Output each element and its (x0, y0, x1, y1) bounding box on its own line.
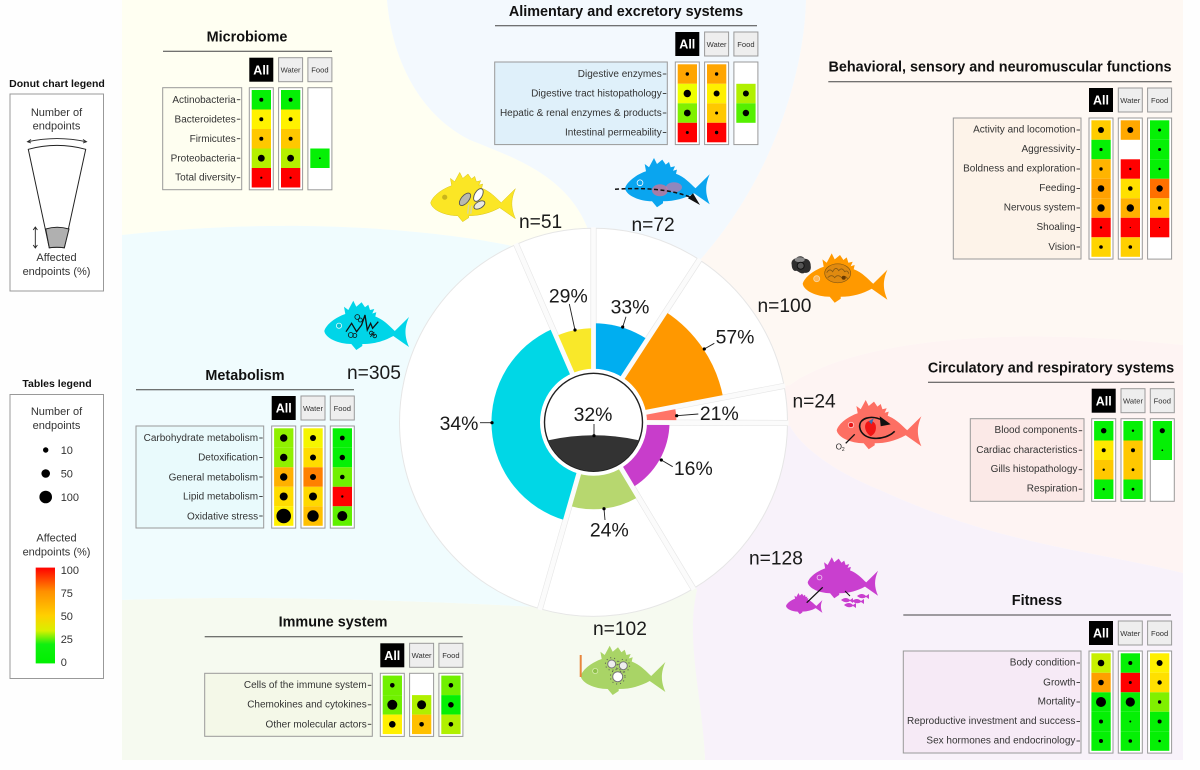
header: All (1089, 88, 1113, 112)
icon: orange fish with brain and camera (792, 253, 887, 303)
legend sector fill (46, 227, 69, 248)
row labels: Sex hormones and endocrinology (926, 736, 1075, 746)
heading: microbiome: Microbiome (207, 30, 287, 46)
table body: immune (205, 643, 463, 736)
header: All: All (679, 38, 695, 52)
percent label: 29% (549, 286, 588, 332)
header: Water (1121, 389, 1145, 413)
row labels: Proteobacteria (171, 154, 236, 165)
row labels (953, 118, 1081, 259)
row labels: Mortality (1038, 696, 1075, 708)
row labels: Intestinal permeability (565, 127, 662, 138)
row labels: Carbohydrate metabolism (144, 433, 258, 444)
sector: circulatory 21% (594, 407, 677, 423)
icon: purple fish with offspring (786, 557, 878, 614)
header: Food: Food (334, 404, 351, 413)
row labels: Boldness and exploration (963, 164, 1075, 174)
legend text: affected endpoints: Affected (36, 532, 77, 544)
count label: n=305: n=305 (347, 363, 401, 384)
background region: immune (122, 422, 705, 760)
sector: immune 24% (570, 422, 638, 509)
row labels (163, 88, 242, 190)
row labels: Shoaling (1036, 222, 1075, 233)
header: All: All (384, 649, 400, 663)
column: Food (330, 426, 354, 528)
table body: behavioral (953, 88, 1172, 259)
color scale (36, 565, 79, 669)
table body: circulatory (970, 389, 1174, 501)
row labels (205, 673, 372, 736)
header: All (1092, 389, 1116, 413)
percent label: 34%: 34% (440, 413, 478, 435)
percent label: 33% (611, 296, 649, 329)
table body: fitness (903, 621, 1172, 753)
header: Food: Food (442, 651, 460, 660)
header: Water (279, 58, 303, 82)
row labels: Activity and locomotion (973, 124, 1075, 136)
column: Water (1121, 419, 1145, 501)
row labels: Respiration (1027, 484, 1077, 495)
count label: n=51: n=51 (519, 212, 562, 233)
legend heading: donut chart: Donut chart legend (9, 78, 105, 90)
percent label: 29%: 29% (549, 286, 588, 308)
outer sectors (400, 228, 788, 616)
legend: tables (10, 378, 104, 678)
header: Food (734, 32, 758, 56)
column: All (1092, 419, 1116, 501)
column: Water (1118, 651, 1142, 753)
header: Water: Water (707, 40, 727, 49)
column: Food (1148, 651, 1172, 753)
column: Food (439, 673, 463, 736)
heading: alimentary: Alimentary and excretory systems (509, 4, 743, 20)
center gauge 32% (540, 369, 647, 476)
sector: fitness 16% (594, 422, 670, 487)
column: Water (1118, 118, 1142, 259)
row labels (136, 426, 264, 528)
row labels (970, 419, 1084, 501)
header: All: All (276, 402, 292, 416)
heading: behavioral: Behavioral, sensory and neuromuscular functions (828, 60, 1172, 76)
table body: metabolism (136, 396, 354, 528)
header: Water (705, 32, 729, 56)
header: Water (410, 643, 434, 667)
row labels: Total diversity (175, 172, 236, 183)
column: Water (301, 426, 325, 528)
legend text: number of endpoints: endpoints (33, 121, 81, 133)
sector: alimentary 33% (594, 323, 648, 422)
row labels: Reproductive investment and success (907, 716, 1075, 727)
heading: circulatory: Circulatory and respiratory systems (928, 360, 1174, 376)
percent label: 16%: 16% (674, 458, 713, 480)
legend arrow: height (33, 227, 37, 248)
header: Water: Water (412, 651, 432, 660)
icon: red fish with heart and oxygen (836, 400, 921, 453)
header: Water (301, 396, 325, 420)
header: Water: Water (1120, 629, 1141, 638)
dot scale: 100 (61, 492, 79, 504)
header: Food: Food (737, 40, 755, 49)
header: Food (1148, 621, 1172, 645)
row labels: Feeding (1039, 183, 1075, 194)
legend heading: tables: Tables legend (22, 378, 92, 390)
row labels: Lipid metabolism (183, 492, 258, 503)
row labels: Aggressivity (1021, 144, 1075, 155)
legend text: affected endpoints: Affected (36, 252, 77, 264)
header: Water (1118, 621, 1142, 645)
icon: red fish with heart and oxygen: O (836, 442, 842, 451)
icon: yellow fish with stones (431, 172, 515, 222)
legend text: number of endpoints: Number of (31, 107, 82, 119)
header: Food: Food (1154, 397, 1171, 406)
row labels: Other molecular actors (266, 719, 367, 730)
donut chart (400, 227, 789, 616)
column: All (249, 88, 273, 190)
row labels: Vision (1048, 242, 1075, 253)
count label: n=24: n=24 (792, 392, 836, 413)
background region: behavioral (594, 0, 1183, 422)
row labels: General metabolism (169, 472, 258, 483)
row labels: Blood components (995, 425, 1077, 436)
icon: red fish with heart and oxygen: 2 (842, 447, 845, 453)
column: Food (1150, 419, 1174, 501)
row labels: Nervous system (1004, 202, 1075, 214)
row labels: Cardiac characteristics (976, 445, 1077, 456)
header: Water: Water (303, 404, 323, 413)
legend box: tables (10, 394, 104, 678)
header: All: All (1093, 627, 1109, 641)
header: Food (439, 643, 463, 667)
header: Food (1148, 88, 1172, 112)
header: All (249, 58, 273, 82)
column: Food (734, 62, 758, 145)
table: fitness (903, 593, 1172, 753)
percent label: 32% (574, 404, 612, 437)
column: All (380, 673, 404, 736)
heading: fitness: Fitness (1012, 593, 1062, 609)
legend sector (28, 145, 86, 248)
count label: n=72: n=72 (632, 215, 675, 236)
row labels: Hepatic & renal enzymes & products (500, 108, 662, 119)
header: Food: Food (1151, 96, 1168, 105)
header: Food (330, 396, 354, 420)
heading: immune system: Immune system (279, 615, 387, 631)
row labels: Body condition (1010, 658, 1075, 668)
header: All (675, 32, 699, 56)
background region: microbiome (122, 0, 594, 422)
column: Food (308, 88, 332, 190)
table: microbiome (163, 30, 332, 190)
count label: n=128: n=128 (749, 548, 803, 569)
color scale: 100 (61, 565, 79, 577)
row labels: Digestive tract histopathology (531, 88, 662, 100)
dot scale: 10 (61, 445, 73, 457)
color scale: 25 (61, 634, 73, 646)
header: All: All (1096, 394, 1112, 408)
percent label: 33%: 33% (611, 296, 649, 318)
table: metabolism (136, 368, 354, 528)
header: Food: Food (311, 65, 329, 74)
row labels: Firmicutes (190, 134, 236, 145)
row labels: Growth (1043, 678, 1075, 688)
background region: fitness (594, 422, 1183, 760)
header: Water: Water (1120, 96, 1141, 105)
sector: metabolism 34% (491, 329, 594, 520)
percent label: 32%: 32% (574, 404, 612, 426)
row labels: Digestive enzymes (578, 69, 662, 80)
header: Food (308, 58, 332, 82)
background region: alimentary and excretory (387, 0, 806, 422)
dot scale (39, 445, 79, 504)
count label: n=102: n=102 (593, 619, 647, 640)
column: All (1089, 118, 1113, 259)
column: Food (1148, 118, 1172, 259)
legend text: number of endpoints: endpoints (33, 420, 81, 432)
color scale: 50 (61, 611, 73, 623)
header: All (1089, 621, 1113, 645)
percent label: 24% (590, 507, 629, 542)
column: All (1089, 651, 1113, 753)
row labels: Detoxification (198, 453, 258, 464)
color scale: 75 (61, 588, 73, 600)
row labels: Cells of the immune system (244, 680, 367, 691)
percent label: 21% (675, 403, 739, 425)
row labels: Bacteroidetes (175, 115, 236, 126)
dot scale: 50 (61, 468, 73, 480)
table: immune system (205, 615, 463, 736)
percent label: 24%: 24% (590, 520, 629, 542)
percent label: 21%: 21% (700, 403, 739, 425)
table: circulatory and respiratory systems (928, 360, 1174, 501)
table body: microbiome (163, 58, 332, 190)
row labels: Oxidative stress (187, 511, 258, 522)
column: All (675, 62, 699, 145)
row labels: Chemokines and cytokines (247, 699, 367, 710)
legend text: number of endpoints: Number of (31, 406, 82, 418)
row labels (495, 62, 667, 145)
heading: metabolism: Metabolism (205, 368, 285, 384)
percent label: 57%: 57% (716, 326, 754, 348)
table body: alimentary (495, 32, 758, 145)
legend text: affected endpoints: endpoints (%) (23, 266, 90, 278)
icon: blue fish with digestive tract (615, 158, 710, 207)
icon: green fish with immune cells and needle (581, 646, 665, 695)
sector: microbiome 29% (556, 328, 594, 422)
legend text: affected endpoints: endpoints (%) (23, 546, 90, 558)
header: Food: Food (1151, 629, 1168, 638)
column: Water (279, 88, 303, 190)
sector: behavioral 57% (594, 312, 723, 422)
legend box: donut chart (10, 94, 104, 291)
row labels: Actinobacteria (172, 95, 236, 106)
header: All: All (1093, 94, 1109, 108)
column: All (272, 426, 296, 528)
legend: donut chart (9, 78, 105, 291)
count label: n=100: n=100 (758, 296, 811, 317)
header: All (272, 396, 296, 420)
column: Water (410, 673, 434, 736)
icon: cyan fish with metabolism signs (324, 301, 409, 350)
column: Water (705, 62, 729, 145)
background region: circulatory (594, 336, 1183, 573)
legend arrow: width (28, 139, 86, 143)
table: alimentary and excretory systems (495, 4, 758, 145)
header: Water: Water (281, 65, 301, 74)
percent label: 57% (703, 326, 754, 351)
header: All: All (253, 63, 269, 77)
row labels (903, 651, 1081, 753)
header: Water: Water (1123, 397, 1143, 406)
table: behavioral, sensory and neuromuscular functions (828, 60, 1172, 259)
header: All (380, 643, 404, 667)
background region: metabolism (122, 226, 594, 607)
header: Water (1118, 88, 1142, 112)
header: Food (1150, 389, 1174, 413)
color scale: 0 (61, 657, 67, 669)
row labels: Gills histopathology (991, 464, 1077, 475)
